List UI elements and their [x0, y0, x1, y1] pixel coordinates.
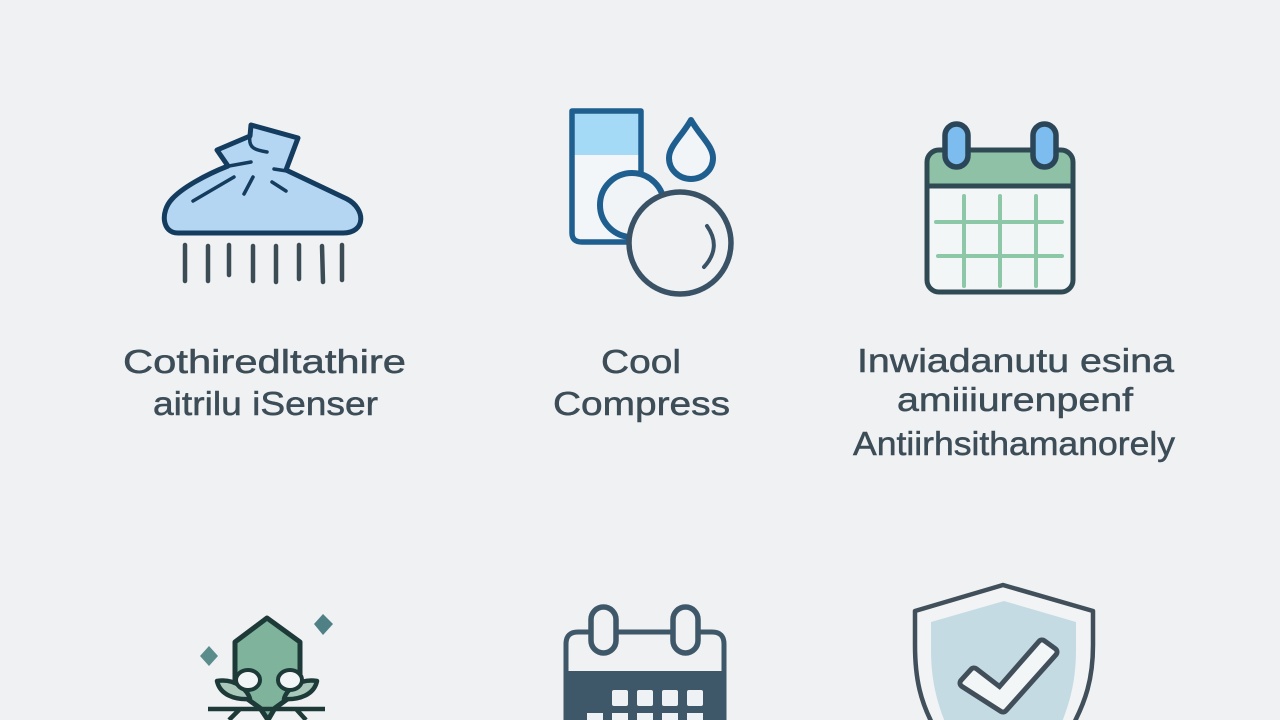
text: first label: Cothiredltathire [123, 343, 406, 380]
text: third label: Inwiadanutu esina [857, 342, 1175, 379]
icon: dark calendar [564, 607, 726, 720]
text: first label [123, 343, 406, 422]
text: cool compress label: Compress [553, 385, 730, 422]
icon: cool compress glass and spheres [572, 111, 731, 294]
text: third label [853, 342, 1176, 462]
text: third label: amiiiurenpenf [897, 381, 1134, 418]
text: cool compress label [553, 343, 730, 422]
text: first label: aitrilu iSenser [153, 385, 378, 422]
icon: shield with check [915, 585, 1093, 720]
text: third label: Antiirhsithamanorely [853, 425, 1176, 462]
icon: green plant figure [200, 614, 333, 720]
icon: green calendar [927, 124, 1073, 292]
icon: ice bag [164, 125, 361, 282]
text: cool compress label: Cool [601, 343, 681, 380]
